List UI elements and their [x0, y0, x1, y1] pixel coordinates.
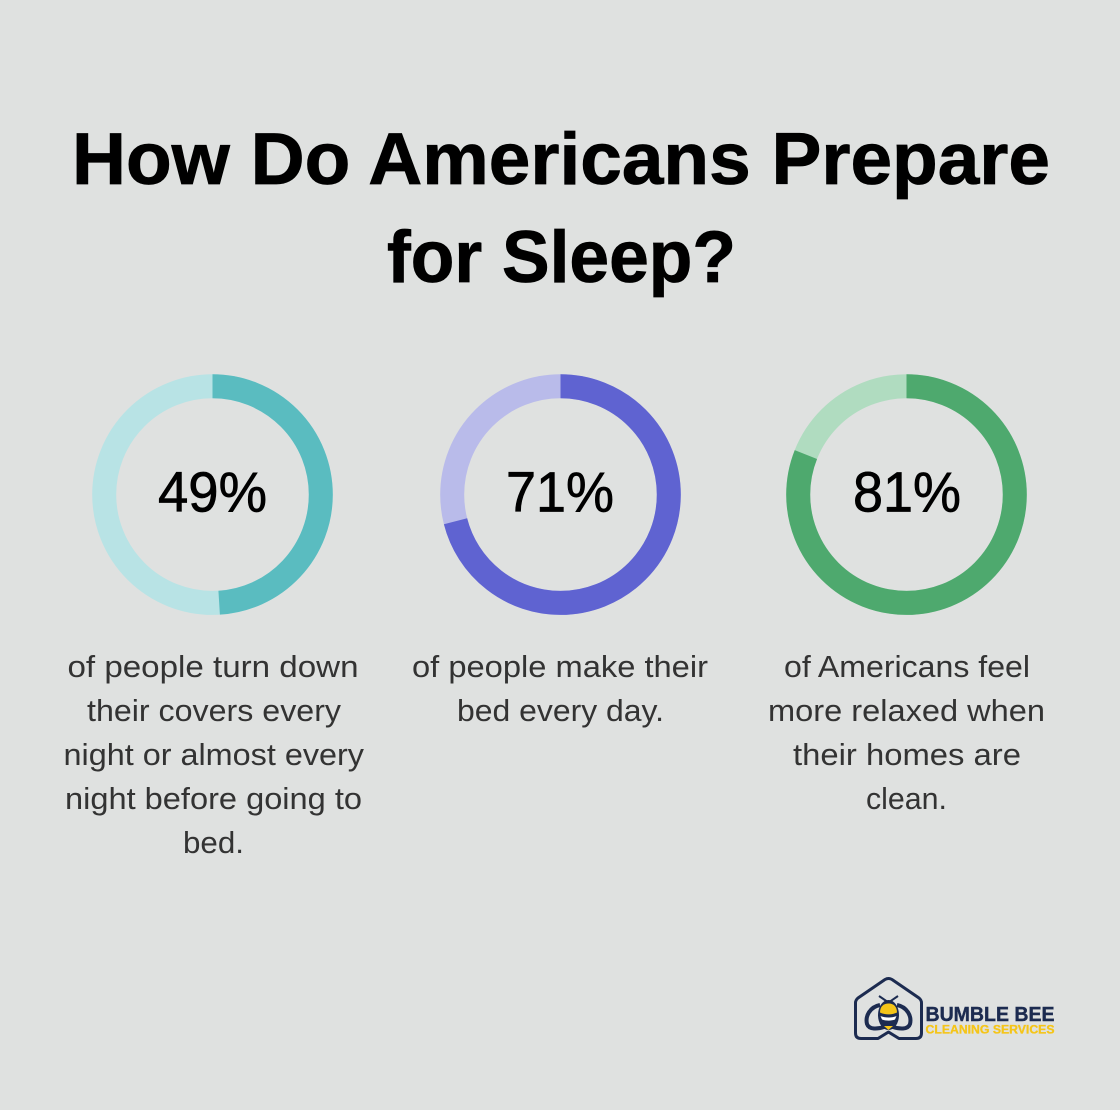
title: How Do Americans Prepare — [72, 119, 1050, 200]
description: 49% — [64, 649, 365, 860]
description: 49%: their covers every — [87, 693, 342, 728]
value: 81%: 81% — [853, 460, 961, 524]
description: 81%: their homes are — [793, 737, 1021, 772]
description: 81%: more relaxed when — [768, 693, 1045, 728]
description: 71%: of people make their — [412, 649, 708, 684]
description: 81%: clean. — [866, 781, 947, 816]
title: for Sleep? — [387, 217, 736, 298]
logo text: CLEANING SERVICES: CLEANING SERVICES — [926, 1024, 1055, 1036]
description: 71%: bed every day. — [457, 693, 664, 728]
description: 49%: night or almost every — [64, 737, 365, 772]
donut chart: 71% — [452, 386, 669, 603]
panel: 49% stat — [64, 386, 365, 860]
donut chart: 49% — [104, 386, 321, 603]
panel: 81% stat — [768, 386, 1045, 816]
description: 49%: night before going to — [65, 781, 362, 816]
description: 49%: bed. — [183, 825, 244, 860]
value: 71%: 71% — [506, 460, 614, 524]
title — [72, 119, 1050, 298]
description: 49%: of people turn down — [68, 649, 358, 684]
description: 71% — [412, 649, 708, 728]
description: 81%: of Americans feel — [784, 649, 1030, 684]
value: 49%: 49% — [158, 460, 267, 524]
icon: house with bee — [856, 978, 922, 1038]
logo: Bumble Bee Cleaning Services — [856, 978, 1055, 1038]
logo text: BUMBLE BEE: BUMBLE BEE — [926, 1004, 1054, 1026]
donut chart: 81% — [798, 386, 1015, 603]
description: 81% — [768, 649, 1045, 816]
panel: 71% stat — [412, 386, 708, 728]
